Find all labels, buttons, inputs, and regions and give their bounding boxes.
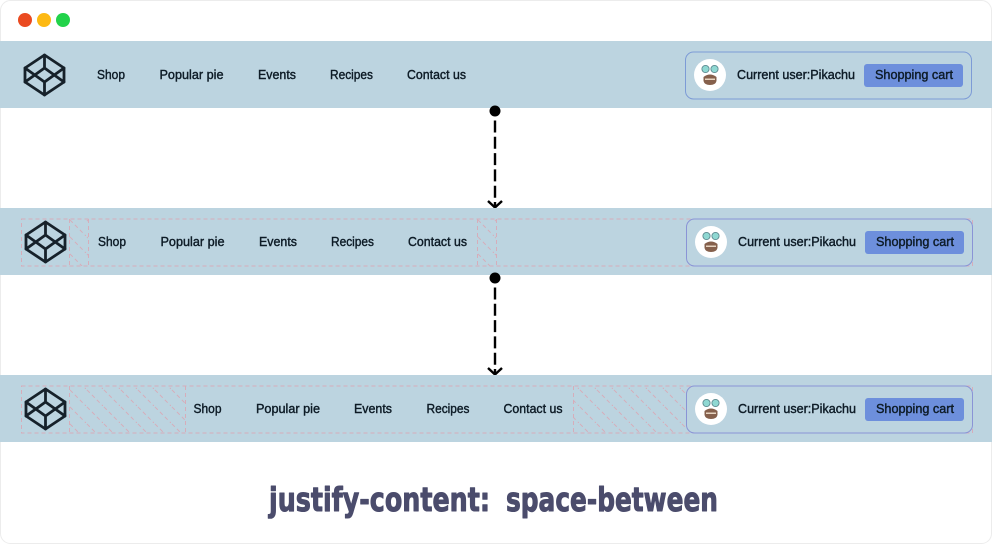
user panel: Current user:Pikachu [738, 234, 856, 249]
nav links: Events [258, 67, 296, 82]
nav links [98, 234, 467, 249]
icon: logo [25, 55, 64, 95]
nav links: Contact us [504, 401, 563, 416]
dashed free-space guides [22, 219, 972, 266]
icon: logo [26, 389, 65, 429]
button: shopping cart [865, 231, 964, 254]
button: shopping cart [864, 64, 963, 87]
navbar 1: initial state [0, 41, 992, 108]
nav links [97, 67, 466, 82]
icon: avatar [694, 59, 726, 91]
nav links: Recipes [331, 234, 374, 249]
nav links: Recipes [330, 67, 373, 82]
button: shopping cart [865, 398, 964, 421]
arrow 2 [488, 272, 502, 374]
window control dots [18, 13, 70, 27]
nav links: Shop [194, 401, 222, 416]
title: justify-content: [267, 480, 490, 519]
button: shopping cart: Shopping cart [876, 234, 954, 249]
navbar 2: auto margin state [0, 208, 992, 275]
nav links: Shop [98, 234, 126, 249]
nav links: Popular pie [160, 234, 224, 249]
user panel [686, 386, 972, 433]
nav links: Recipes [426, 401, 470, 416]
nav links: Contact us [408, 234, 467, 249]
nav links: Events [259, 234, 297, 249]
nav links: Events [354, 401, 392, 416]
nav links [194, 401, 563, 416]
user panel: Current user:Pikachu [738, 401, 856, 416]
nav links: Popular pie [160, 67, 224, 82]
title: space-between [506, 480, 718, 519]
icon: avatar [695, 393, 727, 425]
arrow 1 [488, 106, 502, 208]
nav links: Shop [97, 67, 125, 82]
icon: avatar [695, 226, 727, 258]
navbar 3: space-between state [0, 375, 992, 442]
icon: logo [26, 222, 65, 262]
user panel [686, 219, 972, 266]
button: shopping cart: Shopping cart [875, 67, 953, 82]
nav links: Popular pie [256, 401, 320, 416]
nav links: Contact us [407, 67, 466, 82]
button: shopping cart: Shopping cart [876, 401, 954, 416]
dashed free-space guides [22, 386, 972, 433]
user panel [686, 52, 972, 99]
user panel: Current user:Pikachu [737, 67, 855, 82]
